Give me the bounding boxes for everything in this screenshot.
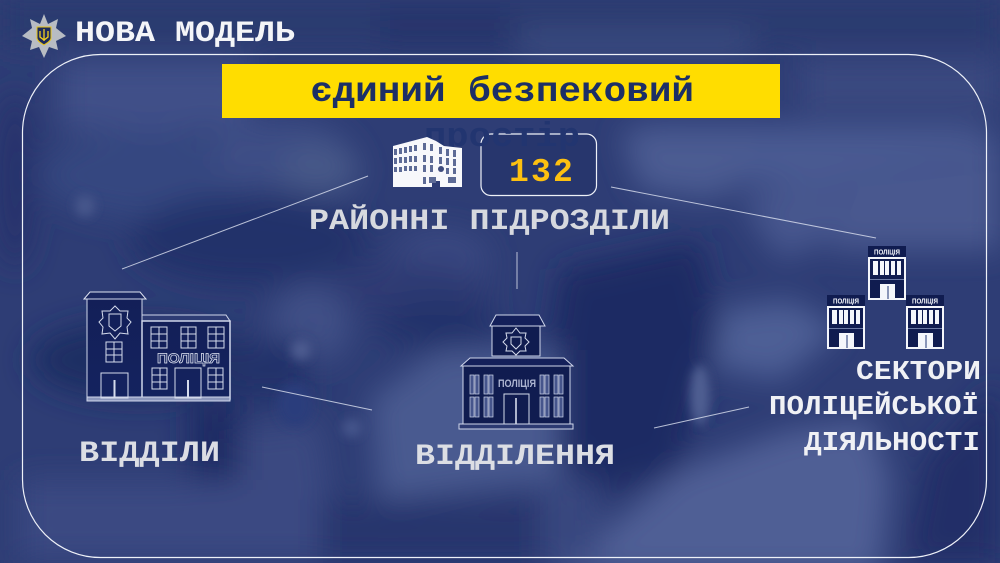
connector lines	[122, 176, 876, 428]
icon: precinct building	[459, 315, 573, 429]
label: СЕКТОРИ ПОЛІЦЕЙСЬКОЇ ДІЯЛЬНОСТІ: ДІЯЛЬНОСТІ	[804, 429, 980, 459]
label: СЕКТОРИ ПОЛІЦЕЙСЬКОЇ ДІЯЛЬНОСТІ: СЕКТОРИ	[856, 358, 981, 388]
heading: НОВА МОДЕЛЬ: НОВА МОДЕЛЬ	[75, 17, 295, 51]
icon: district unit building	[393, 137, 462, 187]
yellow title banner	[222, 64, 780, 118]
police star emblem	[22, 14, 66, 58]
yellow title banner: єдиний безпековий	[310, 72, 694, 112]
icon: precinct building: ПОЛІЦІЯ	[498, 378, 536, 390]
left sector building: ПОЛІЦІЯ	[833, 298, 859, 306]
label: СЕКТОРИ ПОЛІЦЕЙСЬКОЇ ДІЯЛЬНОСТІ: ПОЛІЦЕЙСЬКОЇ	[769, 391, 979, 423]
overflow word: простір: простір	[424, 119, 580, 157]
label: ВІДДІЛИ: ВІДДІЛИ	[79, 437, 220, 471]
right sector building: ПОЛІЦІЯ	[912, 298, 938, 306]
icon: department building	[84, 292, 230, 401]
count box	[481, 134, 596, 196]
label: ВІДДІЛЕННЯ: ВІДДІЛЕННЯ	[415, 440, 615, 474]
icon: police sector buildings	[827, 246, 944, 349]
label: СЕКТОРИ ПОЛІЦЕЙСЬКОЇ ДІЯЛЬНОСТІ	[769, 358, 981, 459]
top sector building: ПОЛІЦІЯ	[874, 250, 900, 256]
count number: 132: 132	[509, 154, 573, 191]
icon: department building: ПОЛІЦІЯ	[157, 350, 220, 366]
label: РАЙОННІ ПІДРОЗДІЛИ: РАЙОННІ ПІДРОЗДІЛИ	[309, 204, 670, 239]
